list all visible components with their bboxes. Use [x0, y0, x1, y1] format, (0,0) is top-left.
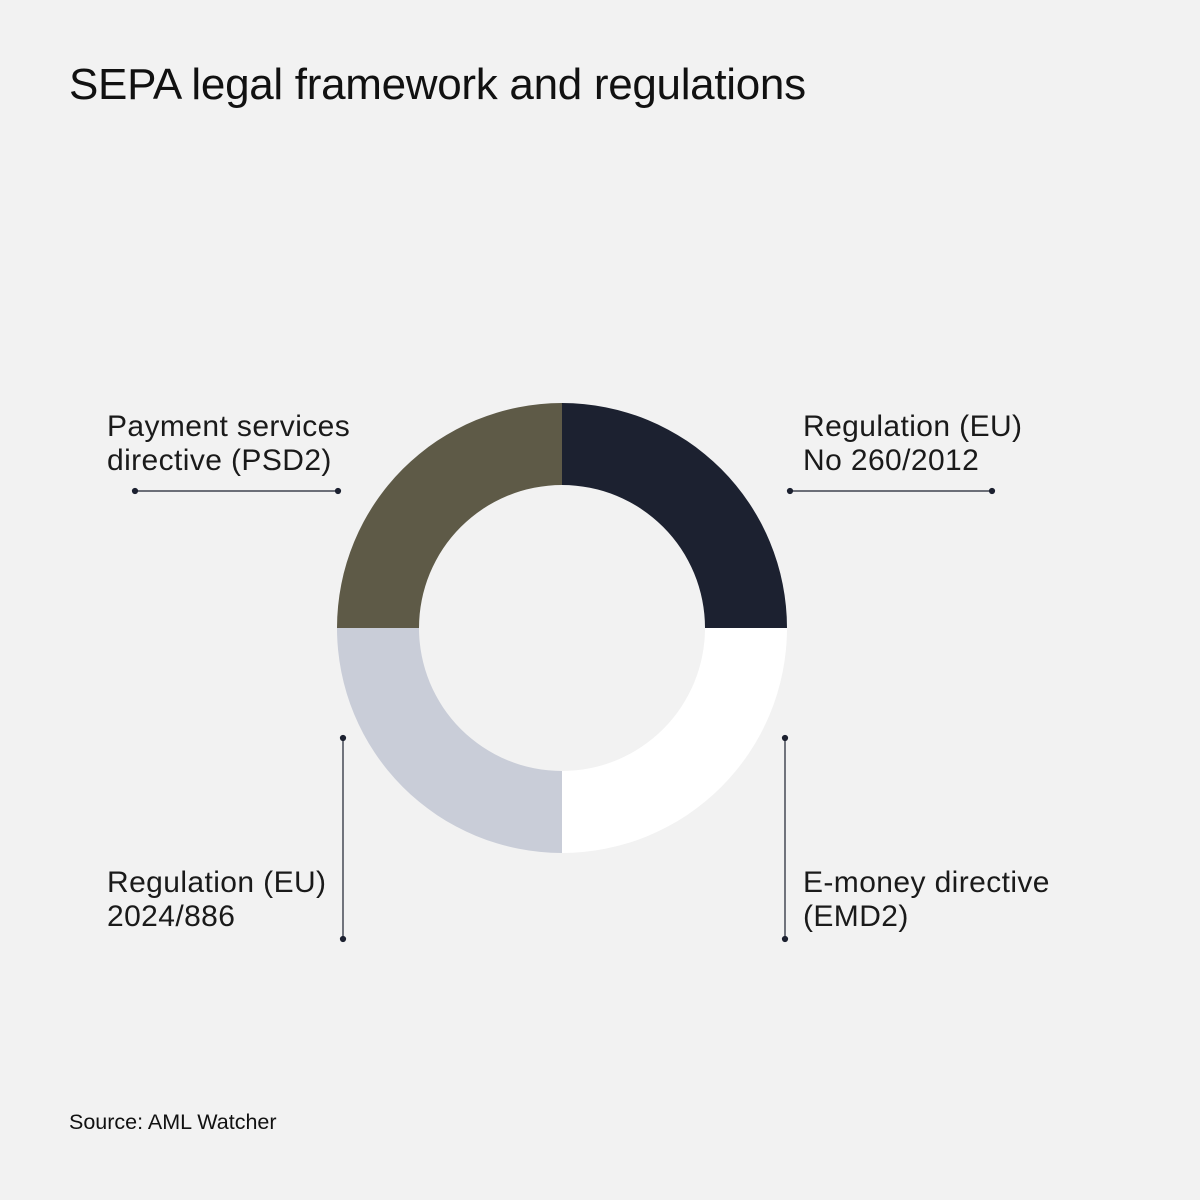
label: PSD2 [107, 410, 350, 477]
segment: PSD2 [337, 403, 562, 628]
connector: EMD2 [782, 736, 788, 942]
title: SEPA legal framework and regulations [69, 60, 806, 109]
label: PSD2: Payment services [107, 410, 350, 443]
label: EMD2: (EMD2) [803, 900, 909, 933]
connector: PSD2 [132, 488, 340, 494]
connector: 260/2012 [788, 488, 994, 494]
segment: Regulation 2024/886 [337, 628, 562, 853]
label: Regulation 2024/886 [107, 866, 326, 933]
label: PSD2: directive (PSD2) [107, 444, 332, 477]
label: EMD2: E-money directive [803, 866, 1050, 899]
label: Regulation 260/2012 [803, 410, 1022, 477]
label: Regulation 260/2012: No 260/2012 [803, 444, 979, 477]
label: Regulation 2024/886: 2024/886 [107, 900, 235, 933]
source: Source: AML Watcher [69, 1110, 277, 1134]
label: Regulation 260/2012: Regulation (EU) [803, 410, 1022, 443]
connector: 2024/886 [340, 736, 346, 942]
segment: Regulation 260/2012 [562, 403, 787, 628]
segment: EMD2 [562, 628, 787, 853]
label: EMD2 [803, 866, 1050, 933]
label: Regulation 2024/886: Regulation (EU) [107, 866, 326, 899]
